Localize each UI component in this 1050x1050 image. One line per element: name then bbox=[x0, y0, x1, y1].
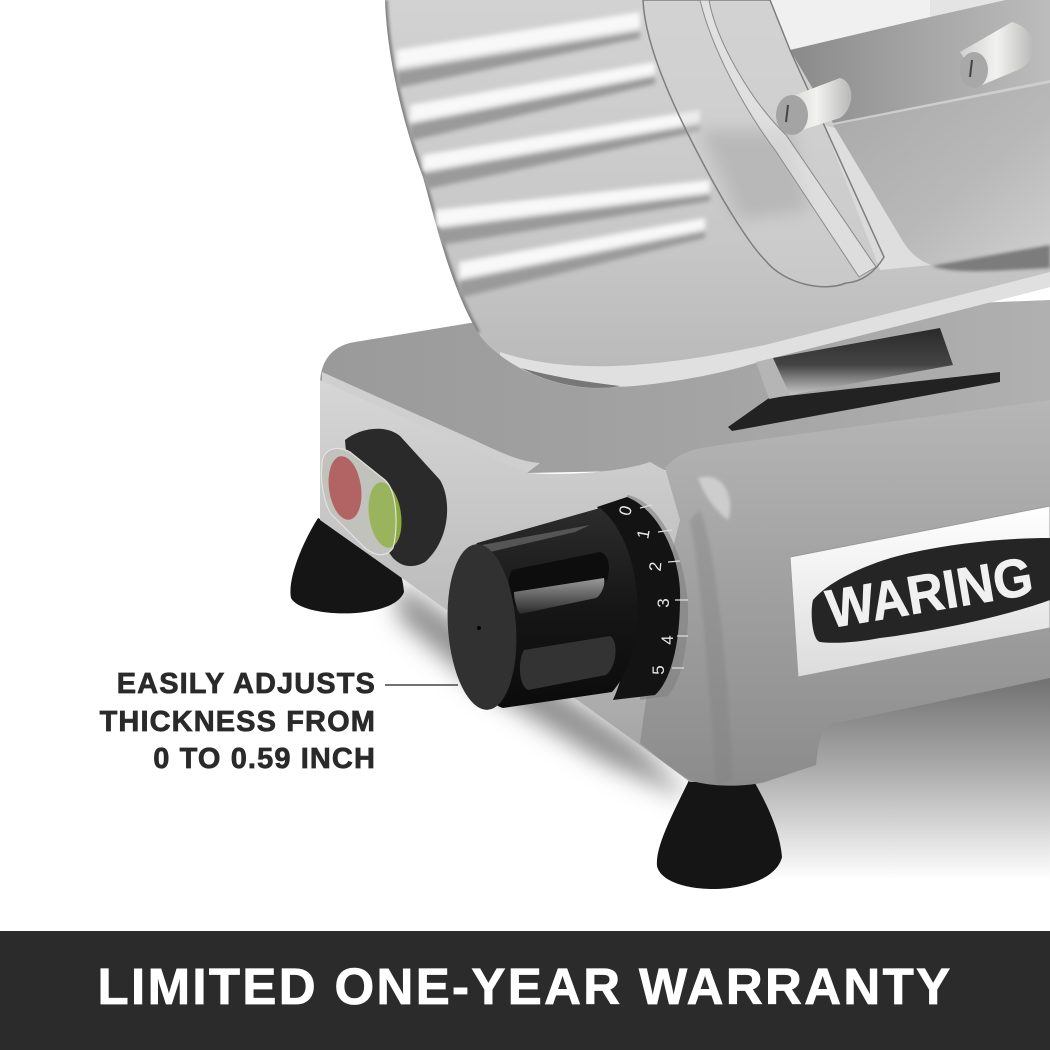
corner highlight bbox=[698, 477, 730, 520]
knob body bbox=[464, 508, 637, 708]
corner shading bbox=[690, 510, 733, 785]
base top face bbox=[320, 300, 1050, 473]
guard rail bbox=[700, 0, 876, 277]
dial ticks bbox=[640, 505, 688, 668]
dial numbers: 0 bbox=[615, 504, 636, 518]
depth dial bbox=[442, 495, 688, 712]
blade bbox=[385, 0, 1050, 388]
red button bbox=[325, 454, 365, 522]
dial numbers: 3 bbox=[654, 598, 673, 608]
carriage lower plate bbox=[833, 83, 1050, 264]
clear cover base bbox=[321, 448, 396, 555]
blade mount bracket bbox=[728, 328, 1000, 431]
warranty banner bbox=[0, 931, 1050, 1050]
carriage grey band bbox=[790, 0, 1050, 123]
blade lower rim bbox=[500, 272, 1050, 387]
base right face bbox=[640, 400, 1050, 786]
dial numbers: 1 bbox=[633, 528, 654, 540]
carriage white area bbox=[770, 0, 930, 50]
blade rim shadow bbox=[521, 368, 620, 388]
blade ridges dark bbox=[397, 32, 710, 298]
switch housing bbox=[345, 429, 447, 566]
dial numbers: 4 bbox=[658, 635, 677, 645]
dial numbers bbox=[615, 504, 677, 675]
blade ridges bright bbox=[397, 12, 710, 279]
dial ring bbox=[597, 497, 680, 700]
callout text: 0 TO 0.59 INCH bbox=[153, 743, 376, 775]
dial numbers: 5 bbox=[649, 665, 668, 675]
shade behind guard bbox=[700, 130, 810, 220]
callout leader line bbox=[385, 684, 458, 686]
floor shadow bbox=[395, 580, 1050, 880]
bolt right bbox=[960, 22, 1034, 88]
machine base bbox=[320, 300, 1050, 786]
dial ghost ring bbox=[627, 495, 688, 700]
knob cap bbox=[442, 542, 522, 712]
knob top highlight bbox=[482, 525, 590, 552]
blade left edge shading bbox=[385, 0, 478, 333]
upper slot bbox=[509, 552, 609, 614]
bolt left bbox=[776, 78, 851, 135]
callout text bbox=[100, 668, 376, 775]
light strip by guard bbox=[824, 125, 931, 270]
green button bbox=[365, 480, 405, 550]
callout text: THICKNESS FROM bbox=[100, 706, 376, 738]
banner heading: LIMITED ONE-YEAR WARRANTY bbox=[98, 958, 952, 1015]
brand name: WARING bbox=[822, 546, 1037, 640]
product illustration: meat slicer bbox=[290, 0, 1050, 889]
power switch bbox=[321, 429, 447, 566]
brand oval bbox=[812, 538, 1050, 643]
transparent guard bbox=[643, 0, 1034, 287]
rear foot bbox=[290, 518, 404, 613]
callout text: EASILY ADJUSTS bbox=[117, 668, 376, 700]
base top rim highlight bbox=[322, 372, 540, 473]
base left face bbox=[320, 380, 722, 782]
clear cover bbox=[321, 448, 396, 555]
lower slot bbox=[520, 636, 616, 690]
front foot bbox=[657, 778, 782, 889]
plate edge shading bbox=[931, 245, 1050, 271]
dial numbers: 2 bbox=[646, 561, 665, 572]
brand plate bbox=[790, 506, 1050, 677]
